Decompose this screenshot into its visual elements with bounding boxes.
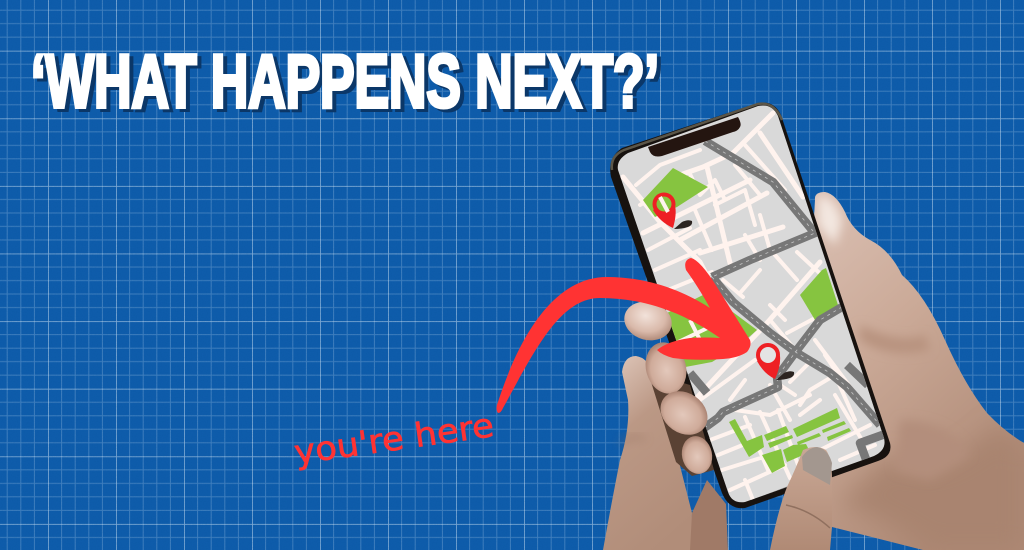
left hand palm and index finger [603,356,728,550]
street across lower-left park [676,320,708,341]
finger 3 [652,382,716,444]
shadow between fingers [648,372,714,476]
map pin: upper [653,194,692,229]
thumbnail [802,447,832,485]
title: ‘WHAT HAPPENS NEXT?’ [31,39,659,123]
finger 4 [678,433,716,477]
gray roads [690,141,888,505]
notch [648,117,741,156]
phone body [610,102,890,508]
phone upper bezel highlight [612,104,782,170]
smartphone [600,95,900,515]
map pin: you are here [757,345,794,380]
pin shadow [776,371,794,380]
park green areas [643,168,851,473]
right hand behind phone [800,192,1024,550]
white streets [623,113,875,505]
fingers holding phone [620,296,716,477]
map screen [618,106,885,502]
finger 1 [620,296,676,346]
pin shadow [674,220,692,229]
red curved arrow [496,258,751,413]
handwritten label: you're here: you're here [292,405,496,472]
finger 2 [640,338,692,398]
thumb on screen [770,447,832,550]
road dashes [700,141,880,431]
finger knuckle crease [621,437,645,445]
